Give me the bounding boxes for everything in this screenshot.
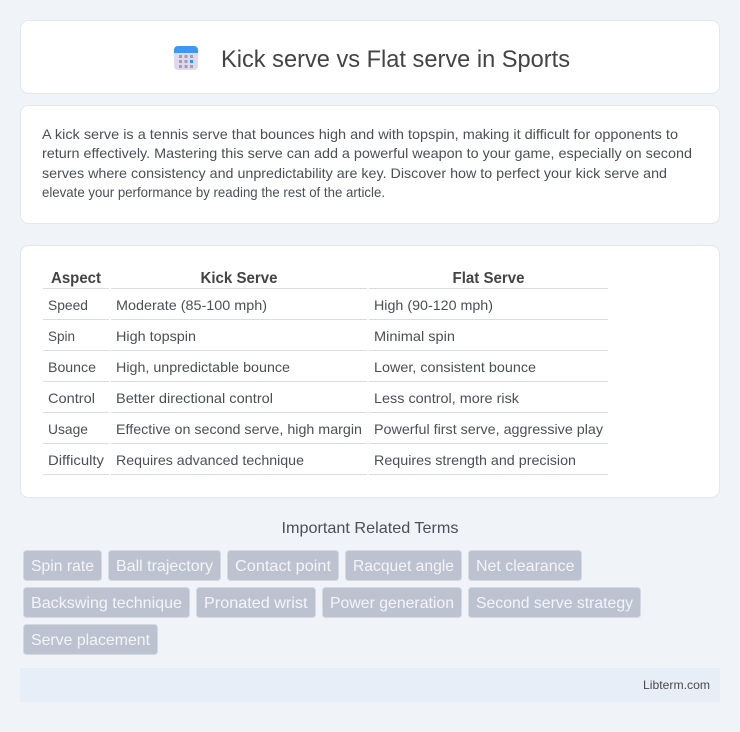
table row: difficulty: Requires advanced technique	[116, 452, 304, 468]
tag: backswing technique	[24, 588, 190, 618]
table row: control	[48, 390, 520, 406]
table row: control: Control	[48, 390, 95, 406]
table row: spin: Minimal spin	[374, 328, 455, 344]
text block: introduction paragraph: elevate your performance by reading the rest of the article.	[42, 184, 385, 200]
tag: racquet angle	[346, 550, 462, 580]
heading: important related terms: Important Related Terms	[282, 520, 458, 537]
tag: second serve strategy: Second serve strategy	[476, 595, 633, 612]
text block: introduction paragraph: A kick serve is a tennis serve that bounces high and with topspin, making it difficult for opponents to	[42, 126, 678, 142]
tag: serve placement	[24, 624, 158, 654]
table row: spin	[48, 328, 455, 344]
table row: difficulty: Difficulty	[48, 452, 104, 468]
table row: speed	[48, 297, 493, 313]
table row: bounce	[48, 359, 536, 375]
icon: calendar	[174, 46, 198, 70]
text block: introduction paragraph: return effectively. Mastering this serve can add a powerful weapon to your game, especially on second	[42, 145, 692, 161]
table row: speed: High (90-120 mph)	[374, 297, 493, 313]
table row: difficulty	[48, 452, 576, 468]
title: Kick serve vs Flat serve in Sports	[221, 46, 570, 73]
footer bar	[20, 668, 720, 702]
table row: usage: Usage	[48, 421, 88, 437]
table row: speed: Moderate (85-100 mph)	[116, 297, 267, 313]
table row: bounce: Lower, consistent bounce	[374, 359, 536, 375]
tag: pronated wrist	[196, 588, 316, 618]
table row: spin: High topspin	[116, 328, 196, 344]
table row: speed: Speed	[48, 297, 88, 313]
table row: usage: Effective on second serve, high margin	[116, 421, 362, 437]
tag: spin rate: Spin rate	[31, 558, 94, 575]
footer credit: Libterm.com	[643, 678, 710, 692]
tag: backswing technique: Backswing technique	[31, 595, 182, 612]
table header row	[51, 270, 525, 287]
table row: usage: Powerful first serve, aggressive play	[374, 421, 603, 437]
tag: power generation: Power generation	[330, 595, 454, 612]
tag: second serve strategy	[468, 588, 640, 618]
tag: contact point	[228, 550, 338, 580]
table grid lines	[43, 288, 608, 474]
tag: serve placement: Serve placement	[31, 632, 151, 649]
tag: net clearance: Net clearance	[476, 558, 575, 575]
panel: introduction	[20, 106, 720, 224]
panel: title header	[20, 20, 720, 94]
table row: control: Better directional control	[116, 390, 273, 406]
table row: difficulty: Requires strength and precision	[374, 452, 576, 468]
table row: usage	[48, 421, 603, 437]
tag: racquet angle: Racquet angle	[353, 558, 454, 575]
tag: power generation	[322, 588, 462, 618]
tag: pronated wrist: Pronated wrist	[204, 595, 308, 612]
table row: bounce: High, unpredictable bounce	[116, 359, 290, 375]
tag: net clearance	[468, 550, 582, 580]
table header row: Kick Serve	[200, 270, 278, 287]
text block: introduction paragraph	[42, 126, 692, 200]
tag: ball trajectory	[108, 550, 220, 580]
tag: ball trajectory: Ball trajectory	[116, 558, 213, 575]
tag: spin rate	[24, 550, 102, 580]
table row: spin: Spin	[48, 328, 75, 344]
text block: introduction paragraph: serves where consistency and unpredictability are key. Discover how to perfect your kick serve and	[42, 165, 667, 181]
related term tags	[24, 550, 640, 654]
table header row: Aspect	[51, 270, 102, 287]
table header row: Flat Serve	[452, 270, 525, 287]
table row: control: Less control, more risk	[374, 390, 520, 406]
tag: contact point: Contact point	[235, 558, 332, 575]
panel: comparison table	[20, 246, 720, 498]
table row: bounce: Bounce	[48, 359, 96, 375]
